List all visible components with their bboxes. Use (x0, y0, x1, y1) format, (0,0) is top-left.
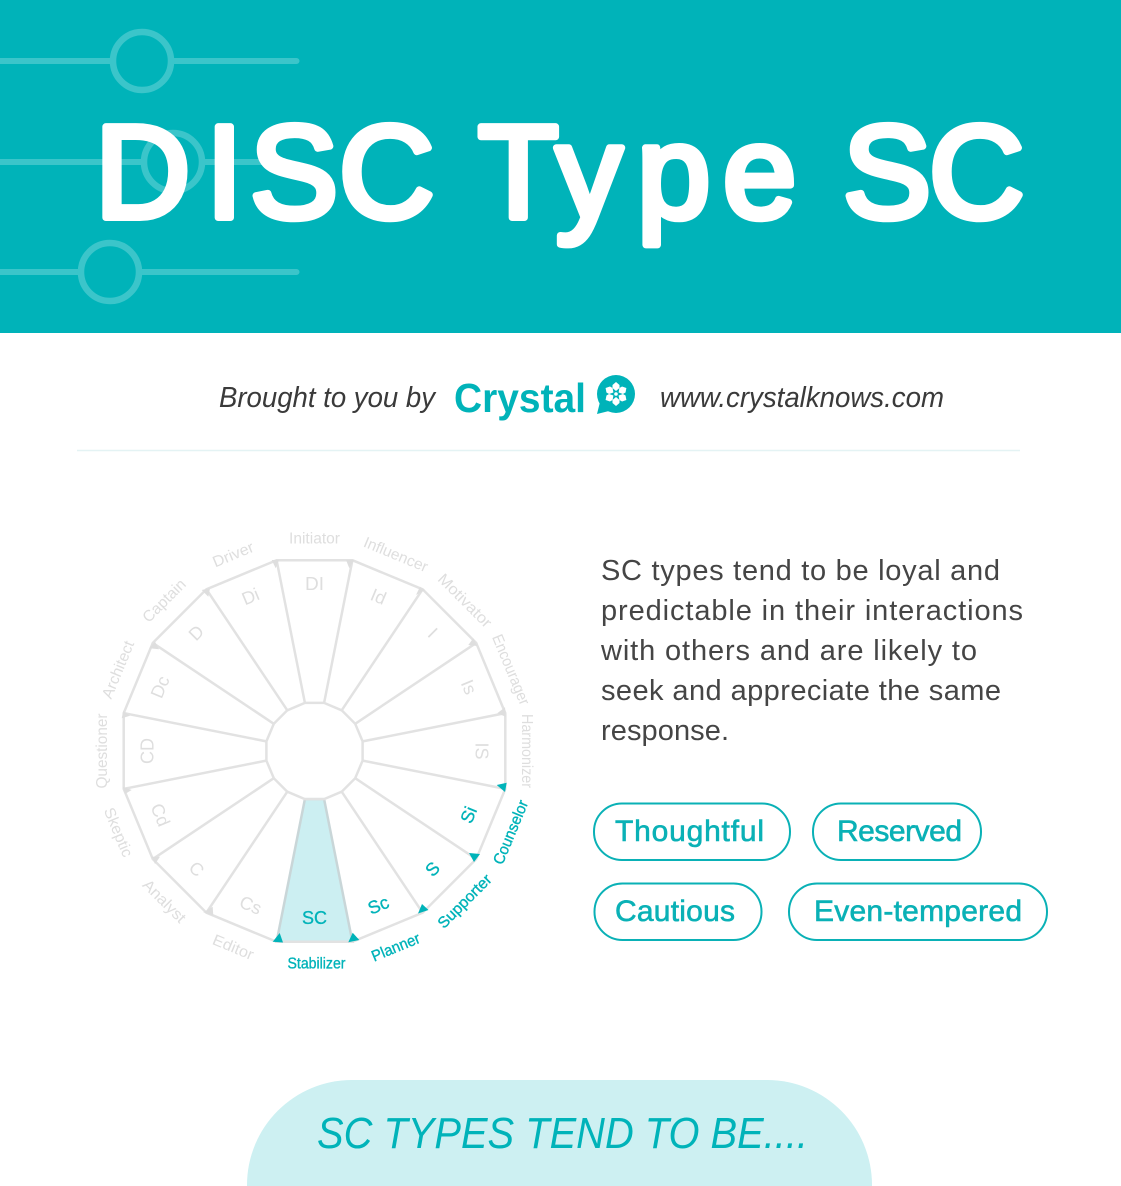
sector codes: Id (368, 585, 389, 609)
tag: Even-tempered: Even-tempered (814, 895, 1022, 928)
sector codes: Cs (237, 892, 265, 919)
description paragraph: with others and are likely to (600, 635, 977, 667)
sector codes: CD (138, 738, 158, 764)
section heading tab (247, 1080, 872, 1186)
outer type names: Skeptic (100, 805, 136, 860)
title: DISC Type SC (95, 98, 1024, 246)
tag: Even-tempered (789, 884, 1047, 940)
vertex markers (122, 560, 507, 942)
tag: Reserved: Reserved (837, 815, 962, 848)
highlighted sector: SC (277, 799, 352, 942)
sector codes: C (185, 857, 208, 881)
sector codes: Sc (365, 892, 392, 919)
outer type names: Questioner (94, 714, 111, 788)
tag: Cautious: Cautious (615, 895, 735, 928)
brought to you by: Brought to you by (219, 382, 436, 414)
icon: logo speech bubble (597, 375, 635, 414)
sector codes: Si (456, 804, 481, 826)
outer type names: Harmonizer (518, 714, 535, 788)
outer type names: Motivator (434, 571, 495, 631)
sector codes: Dc (147, 673, 174, 701)
sector codes: D (185, 621, 208, 645)
sector codes: I (424, 624, 441, 642)
attribution row (219, 375, 944, 421)
tag: Thoughtful (594, 804, 790, 860)
sector codes: Cd (147, 800, 174, 829)
outer type names: Captain (139, 576, 190, 626)
outer type names: Planner (369, 930, 423, 965)
sector codes: SC (302, 908, 327, 928)
sector codes (138, 574, 492, 928)
outer type names: Editor (210, 932, 256, 964)
website: www.crystalknows.com (660, 382, 944, 414)
sector codes: Di (239, 584, 262, 609)
outer type names: Counselor (490, 798, 532, 867)
outer type names: Encourager (488, 632, 533, 708)
outer type names: Initiator (289, 530, 340, 548)
outer type names: Driver (210, 539, 256, 571)
description paragraph: response. (601, 715, 729, 747)
sector codes: DI (305, 574, 324, 594)
description paragraph: SC types tend to be loyal and (601, 555, 1000, 587)
sector codes: IS (472, 742, 492, 760)
outer type names (94, 530, 535, 972)
description paragraph (600, 555, 1023, 747)
tag: Reserved (813, 804, 981, 860)
header banner (0, 0, 1121, 333)
DISC wheel chart (94, 530, 535, 972)
outer type names: Architect (99, 638, 138, 701)
outer type names: Stabilizer (288, 956, 346, 972)
sector codes: Is (457, 677, 481, 697)
sector codes: S (421, 858, 444, 880)
outer type names: Influencer (361, 534, 430, 576)
description paragraph: predictable in their interactions (601, 595, 1023, 627)
wheel outline and spokes (124, 560, 505, 942)
description paragraph: seek and appreciate the same (601, 675, 1001, 707)
outer type names: Supporter (435, 871, 496, 932)
outer type names: Analyst (139, 877, 189, 927)
section heading tab: SC TYPES TEND TO BE.... (317, 1109, 808, 1158)
icon: slider controls (0, 32, 296, 301)
logo wordmark: Crystal (454, 375, 586, 421)
tag: Thoughtful: Thoughtful (615, 815, 764, 848)
tag: Cautious (594, 884, 762, 940)
